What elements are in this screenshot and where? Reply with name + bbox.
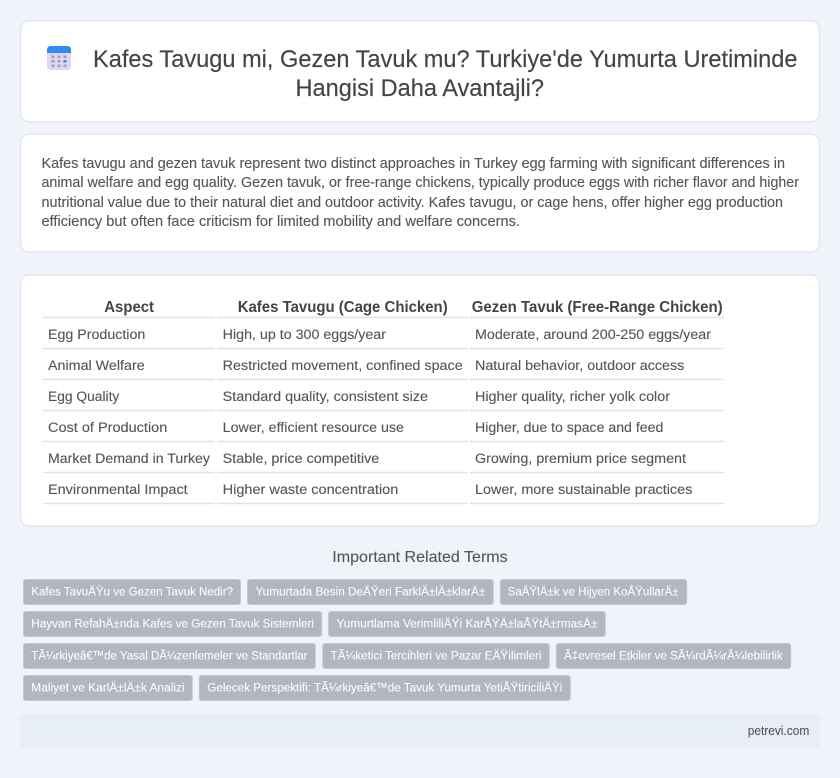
tag: Gelecek Perspektifi: TÃ¼rkiyeâ€™de Tavuk Yumurta YetiÅŸtiriciliÄŸi (207, 679, 562, 694)
tag (556, 644, 791, 668)
text block: introduction paragraph: animal welfare and egg quality. Gezen tavuk, or free-range chickens, typically produce eggs with richer flavor and higher (42, 175, 799, 191)
table row: environmental impact: Environmental Impact (48, 482, 188, 498)
tag: Hayvan RefahÄ±nda Kafes ve Gezen Tavuk Sistemleri (31, 616, 314, 630)
tag: Yumurtlama VerimliliÄŸi KarÅŸÄ±laÅŸtÄ±rmasÄ± (336, 615, 598, 630)
tag: Ã‡evresel Etkiler ve SÃ¼rdÃ¼rÃ¼lebilirlik (564, 648, 783, 662)
tag (24, 612, 322, 636)
text block: introduction paragraph: Kafes tavugu and gezen tavuk represent two distinct approaches in Turkey egg farming with significant differences in (42, 156, 785, 172)
icon: calendar (47, 46, 71, 70)
tag: Maliyet ve KarlÄ±lÄ±k Analizi (31, 680, 185, 694)
tag (500, 580, 687, 604)
table row: egg production: High, up to 300 eggs/year (223, 327, 386, 343)
heading: related terms: Important Related Terms (332, 549, 508, 566)
table row: market demand: Market Demand in Turkey (48, 451, 211, 467)
table row: egg quality: Egg Quality (48, 389, 120, 405)
table header row (43, 299, 724, 318)
table row: cost of production: Cost of Production (48, 420, 167, 436)
tag: Kafes TavuÄŸu ve Gezen Tavuk Nedir? (31, 584, 233, 598)
table row: animal welfare (43, 358, 724, 380)
tag: SaÄŸlÄ±k ve Hijyen KoÅŸullarÄ± (508, 583, 679, 598)
panel: title header (21, 21, 819, 122)
text block: introduction paragraph: nutritional value due to their natural diet and outdoor activity. Kafes tavugu, or cage hens, offer higher egg production (42, 195, 783, 211)
tag (24, 580, 240, 604)
table row: egg quality: Standard quality, consistent size (223, 389, 428, 405)
table header row: Kafes Tavugu (Cage Chicken) (238, 299, 448, 316)
table row: egg production (43, 327, 724, 348)
panel: comparison table (21, 275, 819, 526)
tag (323, 644, 549, 668)
panel: related term tags (24, 580, 791, 700)
text block: introduction paragraph: efficiency but often face criticism for limited mobility and welfare concerns. (42, 214, 520, 230)
table row: market demand (43, 451, 724, 472)
table row: environmental impact (43, 482, 724, 504)
table row: animal welfare: Animal Welfare (48, 358, 145, 374)
title (93, 46, 798, 102)
table row: cost of production: Lower, efficient resource use (223, 420, 404, 436)
table row: cost of production (43, 420, 724, 442)
table row: animal welfare: Natural behavior, outdoor access (475, 358, 684, 374)
table row: environmental impact: Lower, more sustainable practices (475, 482, 692, 498)
table row: egg quality: Higher quality, richer yolk color (475, 389, 670, 405)
footer source text: petrevi.com (748, 724, 809, 738)
panel: introduction (21, 134, 819, 252)
table row: egg production: Moderate, around 200-250 eggs/year (475, 327, 711, 343)
table row: cost of production: Higher, due to space and feed (475, 420, 663, 436)
table header row: Aspect (104, 299, 154, 316)
table row: market demand: Growing, premium price segment (475, 451, 686, 467)
text block: introduction paragraph (42, 156, 799, 230)
table row: market demand: Stable, price competitive (223, 451, 379, 467)
table row: egg production: Egg Production (48, 327, 145, 343)
footer bar (20, 714, 820, 748)
table row: environmental impact: Higher waste concentration (223, 482, 398, 498)
tag (24, 676, 192, 700)
tag (248, 580, 493, 604)
tag (199, 676, 570, 700)
title: Hangisi Daha Avantajli? (296, 75, 544, 102)
table row: animal welfare: Restricted movement, confined space (223, 358, 463, 374)
title: Kafes Tavugu mi, Gezen Tavuk mu? Turkiye'de Yumurta Uretiminde (93, 46, 798, 73)
tag: Yumurtada Besin DeÄŸeri FarklÄ±lÄ±klarÄ± (256, 584, 485, 598)
tag (24, 644, 315, 668)
table header row: Gezen Tavuk (Free-Range Chicken) (472, 299, 723, 316)
tag: TÃ¼rkiyeâ€™de Yasal DÃ¼zenlemeler ve Standartlar (31, 648, 308, 662)
tag: TÃ¼ketici Tercihleri ve Pazar EÄŸilimleri (330, 648, 542, 662)
tag (328, 612, 605, 636)
table row: egg quality (43, 389, 724, 410)
